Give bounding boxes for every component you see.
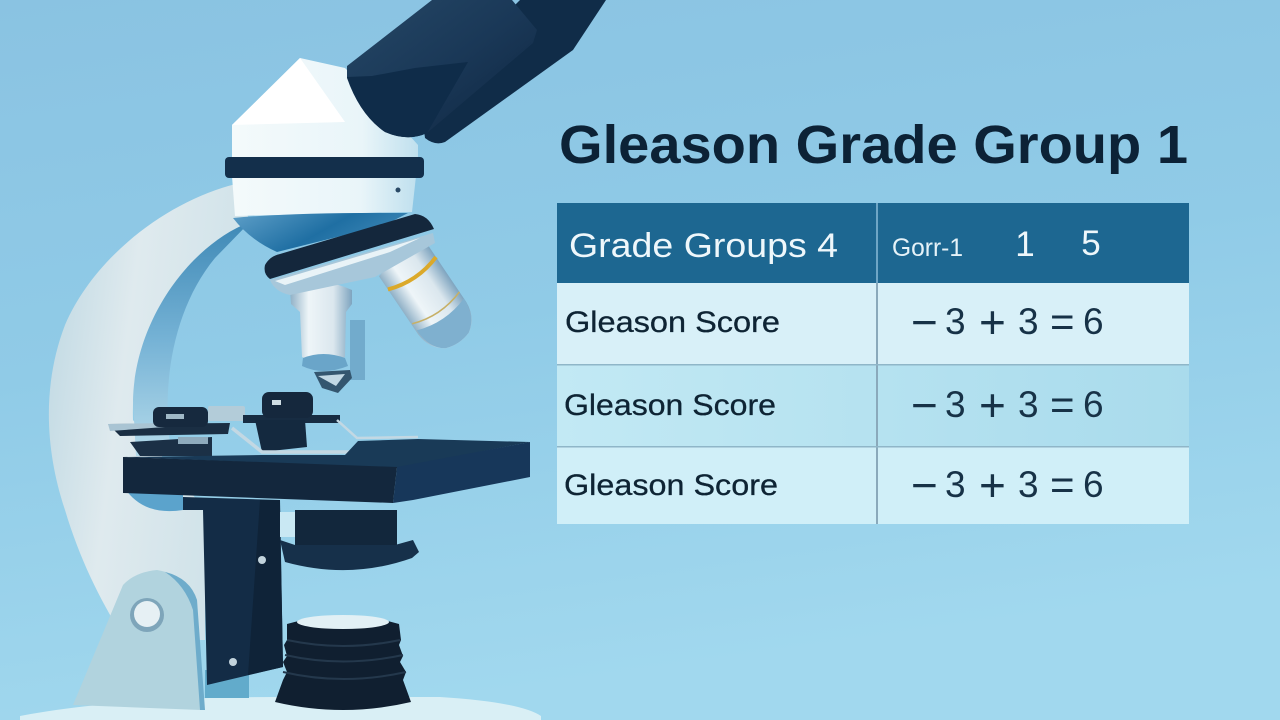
table row 1: + xyxy=(979,296,1006,348)
table row 1: 6 xyxy=(1083,301,1104,342)
illuminator lamp xyxy=(275,615,411,710)
table header row: Gorr-1 xyxy=(892,234,963,262)
table row 3: + xyxy=(979,459,1006,511)
microscope illustration xyxy=(20,0,606,720)
table row 2 xyxy=(557,365,1189,446)
table row 3: 3 xyxy=(1018,464,1039,505)
table row 1 xyxy=(557,283,1189,364)
table row 1: − xyxy=(911,296,938,348)
microscope head xyxy=(225,58,424,252)
table row 2: − xyxy=(911,379,938,431)
table row 2: + xyxy=(979,379,1006,431)
table row 3: = xyxy=(1050,461,1075,508)
left objective lens xyxy=(290,282,365,393)
table header row: Grade Groups 4 xyxy=(569,227,838,265)
table row 3: Gleason Score xyxy=(564,469,778,502)
stage xyxy=(123,439,530,503)
table row 1: 3 xyxy=(945,301,966,342)
table row 2: 3 xyxy=(1018,384,1039,425)
table row 1: 3 xyxy=(1018,301,1039,342)
table row 3: 3 xyxy=(945,464,966,505)
condenser xyxy=(280,510,419,570)
table row 3: 6 xyxy=(1083,464,1104,505)
right objective lens xyxy=(377,240,483,359)
table row 1: Gleason Score xyxy=(565,306,780,339)
rear eyepiece tube xyxy=(420,0,606,143)
table header row: 5 xyxy=(1081,224,1101,263)
table row 3: − xyxy=(911,459,938,511)
table row 2: = xyxy=(1050,381,1075,428)
curved arm xyxy=(49,184,250,640)
table row 3 xyxy=(557,447,1189,524)
nosepiece turret xyxy=(265,214,435,295)
dark collar band xyxy=(225,157,424,178)
table row 2: 3 xyxy=(945,384,966,425)
front eyepiece tube xyxy=(347,0,537,137)
table row 2: 6 xyxy=(1083,384,1104,425)
grade group table xyxy=(557,203,1189,524)
table row 2: Gleason Score xyxy=(564,389,776,422)
table header row: 1 xyxy=(1015,225,1035,264)
table row 1: = xyxy=(1050,298,1075,345)
vertical column xyxy=(183,497,283,698)
title: Gleason Grade Group 1 xyxy=(559,115,1188,175)
microscope base xyxy=(20,697,541,720)
stage clips and knobs xyxy=(108,392,418,456)
table header row xyxy=(557,203,1189,283)
arm foot xyxy=(73,570,205,710)
